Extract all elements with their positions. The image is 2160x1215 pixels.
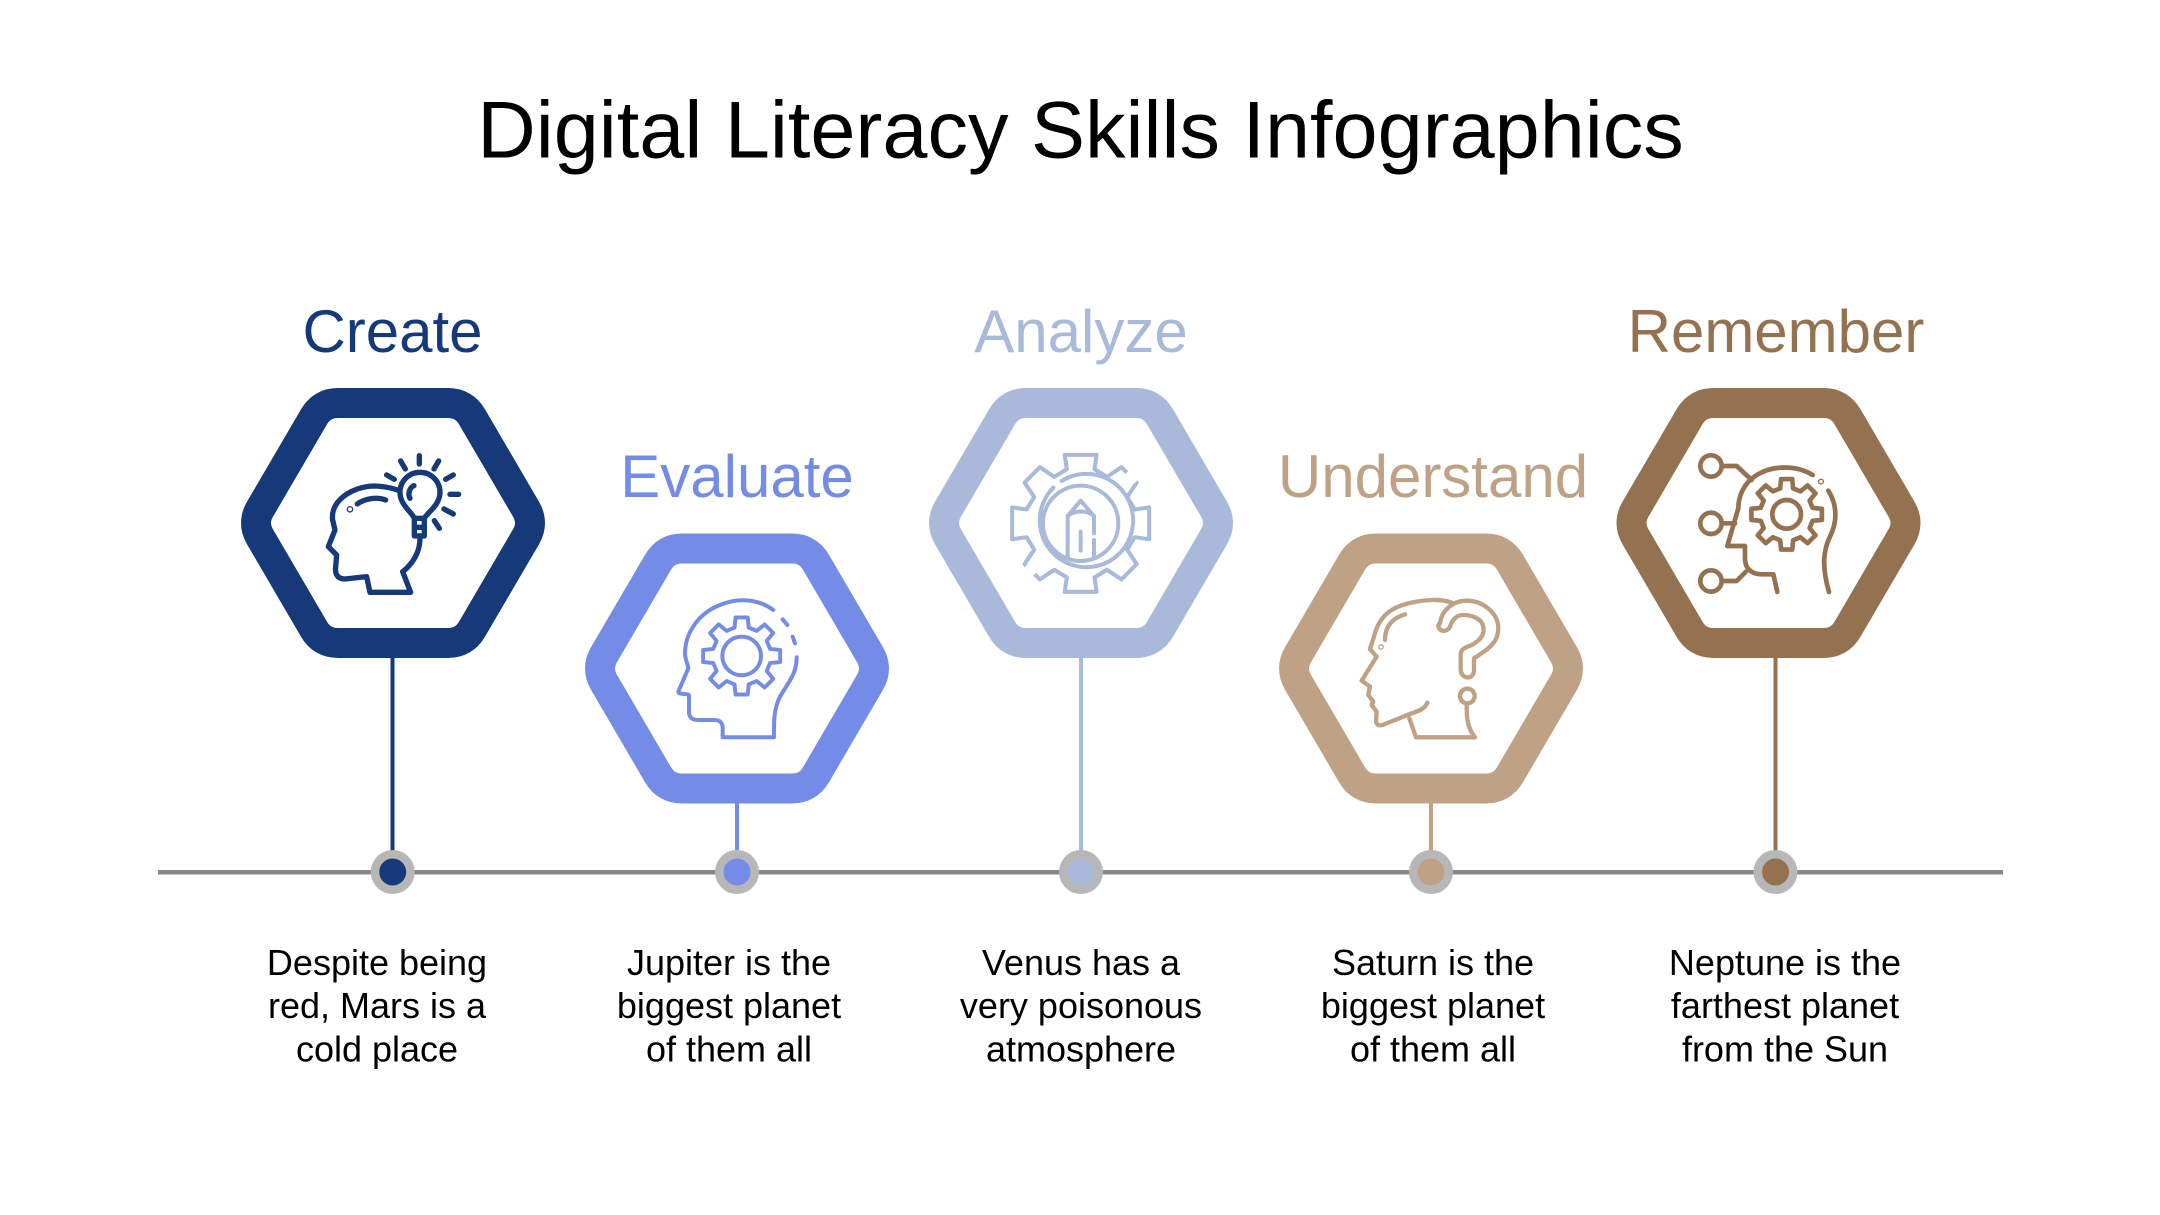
step: Create xyxy=(256,298,530,1070)
icon: head with light bulb xyxy=(328,456,459,592)
icon: head with question mark xyxy=(1362,600,1498,737)
connector stem xyxy=(390,655,394,872)
timeline node xyxy=(1754,850,1798,894)
step: Evaluate xyxy=(600,443,874,1070)
connector stem xyxy=(1079,655,1083,872)
timeline node xyxy=(715,850,759,894)
description: Saturn is the xyxy=(1332,942,1534,983)
timeline node xyxy=(1059,850,1103,894)
description: cold place xyxy=(296,1028,458,1070)
step: Remember xyxy=(1628,298,1924,1070)
icon: head with gear xyxy=(678,600,797,737)
connector stem xyxy=(1429,800,1433,872)
connector stem xyxy=(735,800,739,872)
description: Venus has a xyxy=(982,942,1181,983)
description: red, Mars is a xyxy=(268,985,487,1026)
hexagon frame xyxy=(1294,548,1568,788)
description: biggest planet xyxy=(617,985,841,1026)
description: farthest planet xyxy=(1671,985,1899,1026)
description: Neptune is the xyxy=(1669,942,1901,983)
icon: gear with pencil xyxy=(1012,455,1149,592)
description: biggest planet xyxy=(1321,985,1545,1026)
hexagon frame xyxy=(600,548,874,788)
heading: Remember: Remember xyxy=(1628,298,1924,365)
timeline node xyxy=(371,850,415,894)
description: atmosphere xyxy=(986,1028,1176,1070)
heading: Analyze: Analyze xyxy=(974,298,1188,365)
title: Digital Literacy Skills Infographics xyxy=(477,86,1684,176)
description: from the Sun xyxy=(1682,1028,1888,1070)
heading: Create: Create xyxy=(302,298,483,365)
hexagon frame xyxy=(256,403,530,643)
step: Understand xyxy=(1278,443,1588,1070)
icon: head with gear and network nodes xyxy=(1700,455,1835,592)
connector stem xyxy=(1774,655,1778,872)
timeline node xyxy=(1409,850,1453,894)
step: Analyze xyxy=(944,298,1218,1070)
description: very poisonous xyxy=(960,985,1202,1026)
heading: Evaluate: Evaluate xyxy=(620,443,854,510)
description: Jupiter is the xyxy=(627,942,831,983)
hexagon frame xyxy=(1632,403,1906,643)
heading: Understand: Understand xyxy=(1278,443,1588,510)
description: Despite being xyxy=(267,942,487,983)
hexagon frame xyxy=(944,403,1218,643)
description: of them all xyxy=(646,1028,812,1070)
timeline axis xyxy=(158,870,2003,874)
description: of them all xyxy=(1350,1028,1516,1070)
